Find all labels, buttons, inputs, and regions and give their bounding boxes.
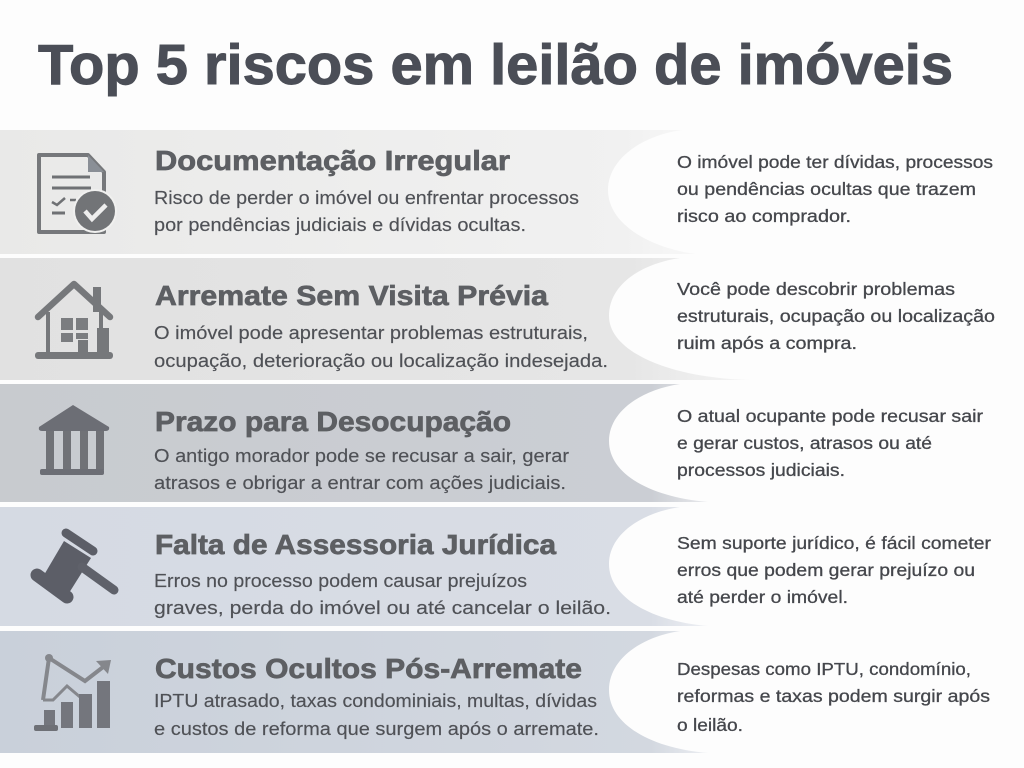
- description: Erros no processo podem causar prejuízos: [154, 571, 527, 591]
- panel: falta de assessoria jurídica: [0, 507, 991, 626]
- side note: [677, 279, 995, 353]
- band 1: [0, 130, 696, 254]
- description: Risco de perder o imóvel ou enfrentar processos: [154, 188, 579, 208]
- description: ocupação, deterioração ou localização indesejada.: [154, 351, 608, 371]
- description: IPTU atrasado, taxas condominiais, multas, dívidas: [154, 691, 597, 711]
- side note: [677, 533, 991, 607]
- description: por pendências judiciais e dívidas ocultas.: [154, 215, 526, 235]
- panel: arremate sem visita prévia: [0, 258, 995, 380]
- side note: e gerar custos, atrasos ou até: [677, 433, 932, 453]
- side note: estruturais, ocupação ou localização: [677, 306, 995, 326]
- side note: ruim após a compra.: [677, 333, 857, 353]
- heading: Custos Ocultos Pós-Arremate: [155, 653, 582, 684]
- description: atrasos e obrigar a entrar com ações judiciais.: [154, 473, 566, 493]
- description: graves, perda do imóvel ou até cancelar o leilão.: [154, 598, 611, 618]
- side note: Sem suporte jurídico, é fácil cometer: [677, 533, 991, 553]
- description: [154, 446, 569, 493]
- band 2: [0, 258, 750, 380]
- icon: document with check: [39, 155, 117, 233]
- band 5: [0, 631, 708, 753]
- description: [154, 323, 608, 371]
- side note: [677, 659, 990, 735]
- heading: Falta de Assessoria Jurídica: [155, 529, 557, 560]
- icon: house: [35, 284, 113, 359]
- side note: Você pode descobrir problemas: [677, 279, 955, 299]
- side note: [677, 152, 993, 226]
- panel: prazo para desocupação: [0, 384, 983, 502]
- panel: custos ocultos pós-arremate: [0, 631, 990, 753]
- description: O antigo morador pode se recusar a sair, gerar: [154, 446, 569, 466]
- heading: Documentação Irregular: [155, 145, 510, 176]
- description: [154, 188, 579, 235]
- title: Top 5 riscos em leilão de imóveis: [38, 33, 953, 97]
- heading: Prazo para Desocupação: [155, 406, 511, 437]
- side note: ou pendências ocultas que trazem: [677, 179, 976, 199]
- side note: risco ao comprador.: [677, 206, 851, 226]
- description: [154, 691, 599, 739]
- side note: até perder o imóvel.: [677, 587, 848, 607]
- description: [154, 571, 611, 618]
- side note: erros que podem gerar prejuízo ou: [677, 560, 975, 580]
- band 3: [0, 384, 708, 502]
- side note: [677, 406, 983, 480]
- band 4: [0, 507, 708, 626]
- panel: documentação irregular: [0, 130, 993, 254]
- icon: columned building: [39, 405, 109, 475]
- side note: Despesas como IPTU, condomínio,: [677, 659, 971, 679]
- icon: gavel: [37, 533, 114, 597]
- side note: O imóvel pode ter dívidas, processos: [677, 152, 993, 172]
- side note: o leilão.: [677, 715, 743, 735]
- description: O imóvel pode apresentar problemas estruturais,: [154, 323, 588, 343]
- side note: O atual ocupante pode recusar sair: [677, 406, 983, 426]
- icon: rising chart: [34, 654, 111, 731]
- description: e custos de reforma que surgem após o arremate.: [154, 719, 599, 739]
- side note: reformas e taxas podem surgir após: [677, 686, 990, 706]
- heading: Arremate Sem Visita Prévia: [155, 280, 549, 311]
- side note: processos judiciais.: [677, 460, 845, 480]
